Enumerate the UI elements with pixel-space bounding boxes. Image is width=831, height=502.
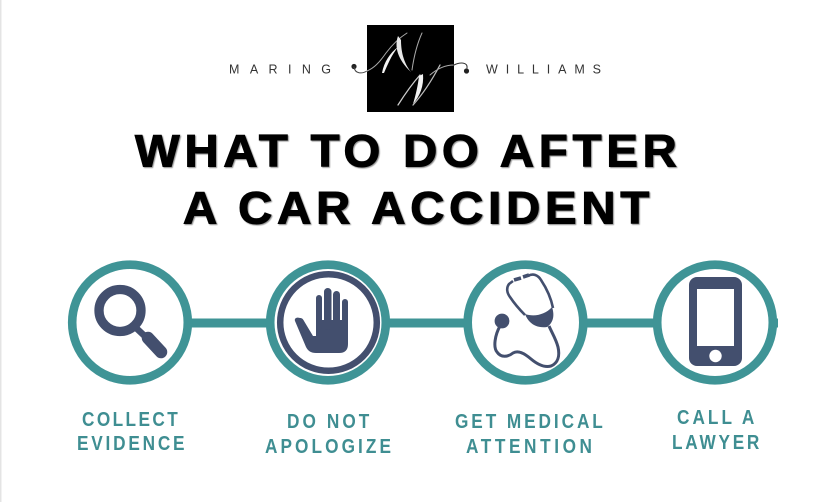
label: get medical attention: GET MEDICAL: [455, 411, 603, 433]
step 2: do not apologize: [265, 265, 391, 458]
timeline connector: [185, 318, 778, 328]
title line 2: A CAR ACCIDENT: [183, 183, 649, 233]
circle 2: [270, 265, 386, 380]
title: [135, 126, 677, 233]
step 4: call a lawyer: [657, 265, 773, 454]
icon: stop hand: [280, 274, 377, 371]
logo: Maring Williams: [229, 25, 601, 112]
label: collect evidence: EVIDENCE: [77, 433, 185, 455]
label: get medical attention: [455, 411, 603, 458]
label: do not apologize: [265, 411, 391, 458]
logo black square: [367, 25, 454, 112]
circle 4: [657, 265, 773, 380]
icon: stethoscope: [495, 275, 559, 367]
step 1: collect evidence: [72, 265, 188, 455]
label: call a lawyer: LAWYER: [672, 432, 760, 454]
label: do not apologize: APOLOGIZE: [265, 436, 391, 458]
label: do not apologize: DO NOT: [287, 411, 370, 433]
icon: smartphone: [689, 277, 742, 366]
label: call a lawyer: [672, 407, 760, 454]
title line 1: WHAT TO DO AFTER: [135, 126, 677, 176]
label: get medical attention: ATTENTION: [466, 436, 592, 458]
label: collect evidence: COLLECT: [82, 409, 178, 431]
step 3: get medical attention: [455, 265, 603, 458]
label: call a lawyer: CALL A: [677, 407, 755, 429]
logo monogram flourish: [351, 33, 469, 105]
circle 1: [72, 265, 188, 380]
circle 3: [468, 265, 583, 380]
icon: magnifying glass: [99, 290, 161, 352]
logo wordmark: Williams: WILLIAMS: [486, 62, 601, 76]
label: collect evidence: [77, 409, 185, 455]
logo wordmark: Maring: MARING: [229, 62, 331, 76]
